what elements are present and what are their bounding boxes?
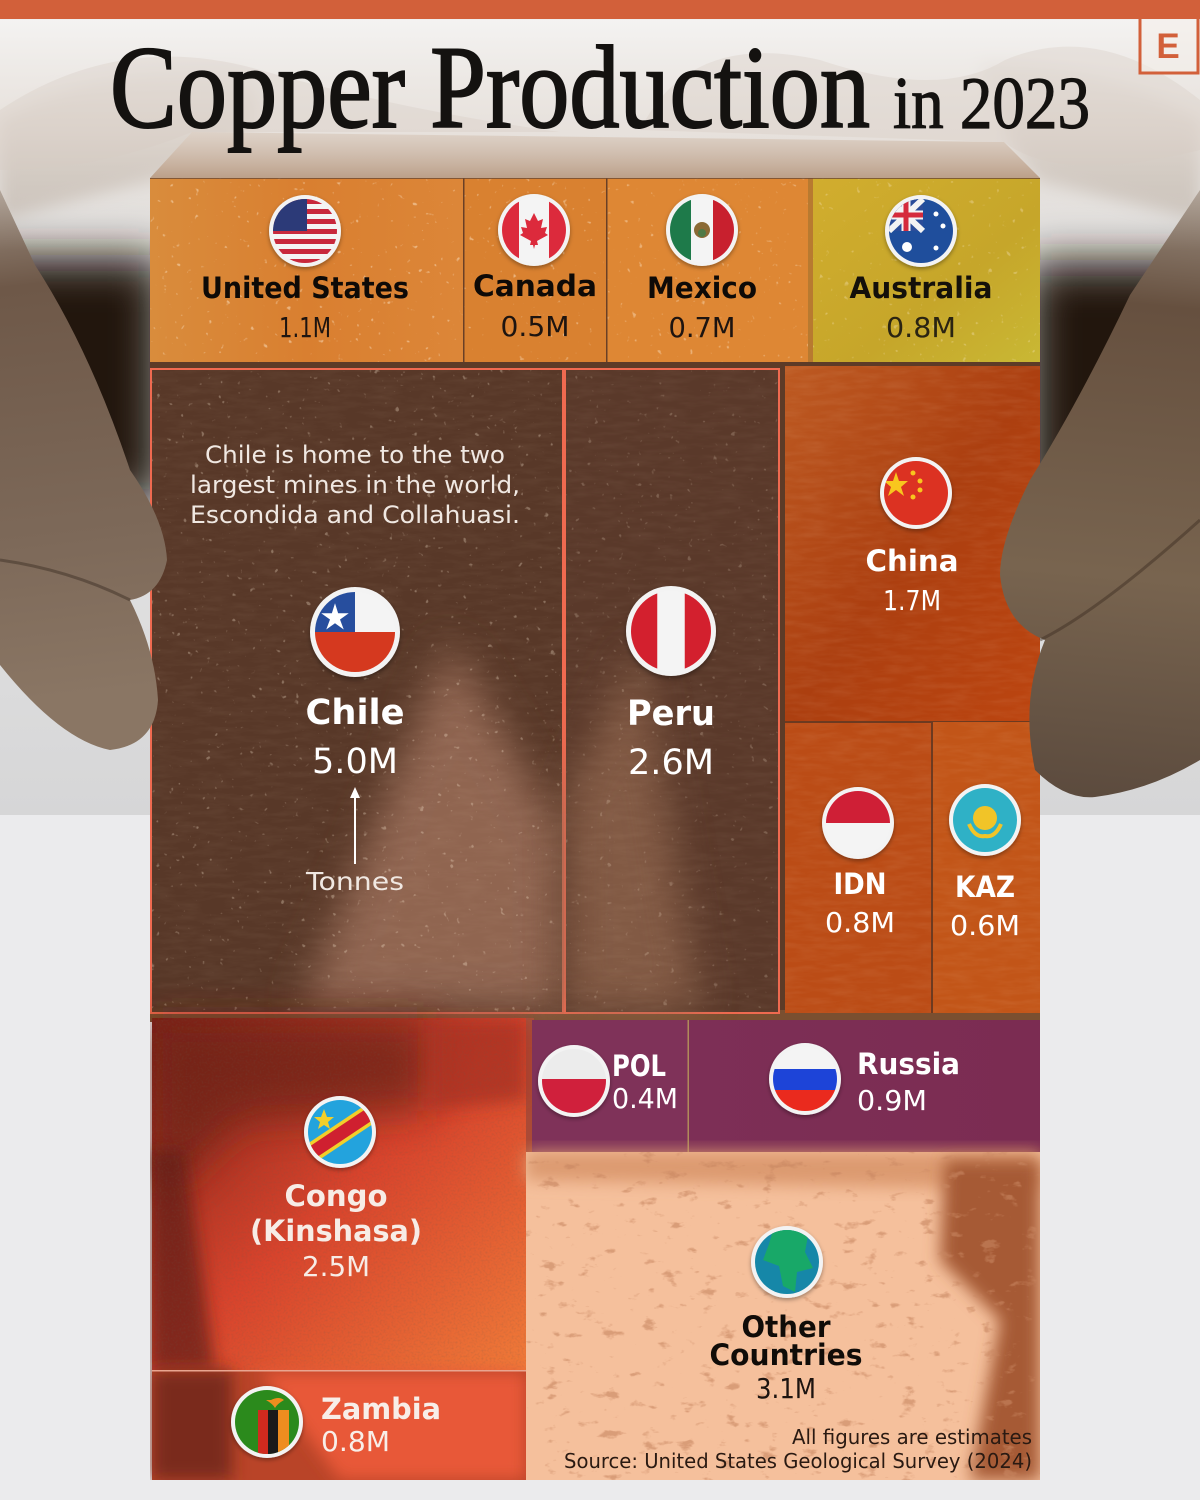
value: 0.8M: 0.8M — [825, 906, 895, 939]
label: Congo (Kinshasa): Congo — [284, 1179, 388, 1213]
value: 0.8M: 0.8M — [321, 1425, 390, 1458]
panel: Canada — [463, 178, 606, 362]
title: Copper Production — [110, 22, 870, 153]
logo — [1140, 19, 1198, 73]
panel: Zambia — [152, 1370, 526, 1480]
icon: Kazakhstan flag — [949, 784, 1021, 856]
text: Chile note: Chile is home to the two — [205, 441, 505, 469]
label: POL: POL — [612, 1049, 666, 1083]
background: pale top gloves fade — [0, 20, 1200, 250]
glove: right hand — [1000, 190, 1200, 797]
panel: Poland — [532, 1020, 689, 1152]
label: Chile: Chile — [306, 693, 404, 733]
value: 1.1M: 1.1M — [279, 311, 331, 344]
value: 5.0M: 5.0M — [312, 742, 398, 782]
icon: globe — [751, 1226, 823, 1298]
panel: Other Countries — [526, 1152, 1040, 1480]
icon: Peru flag — [626, 586, 716, 676]
panel: Kazakhstan — [931, 722, 1040, 1013]
panel: Australia — [813, 178, 1040, 362]
label: IDN: IDN — [834, 867, 886, 901]
treemap panels — [150, 176, 1040, 1480]
label: Tonnes: Tonnes — [305, 867, 404, 896]
text: Chile note: Escondida and Collahuasi. — [190, 501, 520, 529]
label: Other Countries: Other — [742, 1310, 831, 1344]
panel: Indonesia — [785, 721, 1040, 1013]
logo: E — [1156, 27, 1180, 66]
value: 0.6M: 0.6M — [950, 909, 1020, 942]
label: United States: United States — [201, 271, 409, 305]
value: 2.6M: 2.6M — [628, 743, 714, 783]
label: Zambia: Zambia — [321, 1392, 441, 1426]
label: Other Countries: Countries — [710, 1338, 862, 1372]
panel: Chile — [151, 369, 563, 1013]
value: 0.4M: 0.4M — [612, 1082, 678, 1115]
icon: Congo flag — [304, 1096, 376, 1168]
label: Australia: Australia — [850, 271, 992, 305]
label: Mexico: Mexico — [647, 271, 757, 305]
panel: Peru — [565, 369, 779, 1013]
label: Russia: Russia — [857, 1047, 960, 1081]
text: Chile note: largest mines in the world, — [190, 471, 520, 499]
value: 0.7M: 0.7M — [668, 311, 736, 344]
label: Peru: Peru — [627, 694, 715, 734]
panel: China — [785, 366, 1040, 722]
icon: Chile flag — [310, 587, 400, 677]
panel: United States — [150, 178, 463, 362]
label: Canada: Canada — [473, 269, 597, 303]
icon: Indonesia flag — [822, 787, 894, 859]
label: Congo (Kinshasa): (Kinshasa) — [250, 1214, 422, 1248]
value: 0.8M: 0.8M — [886, 311, 956, 344]
icon: Zambia flag — [231, 1386, 303, 1458]
icon: Mexico flag — [666, 194, 738, 266]
panel: Congo (Kinshasa) — [150, 1018, 526, 1370]
text: source note: All figures are estimates — [792, 1425, 1032, 1449]
value: 0.5M: 0.5M — [500, 310, 570, 343]
header bar — [0, 0, 1200, 19]
label: China: China — [866, 544, 958, 578]
icon: Canada flag — [498, 194, 570, 266]
value: 1.7M: 1.7M — [883, 584, 941, 617]
value: 2.5M: 2.5M — [302, 1250, 370, 1283]
panel: Mexico — [606, 178, 808, 362]
value: 3.1M: 3.1M — [756, 1372, 816, 1405]
panel: Russia — [689, 1020, 1040, 1152]
icon: US flag — [269, 195, 341, 267]
icon: Australia flag — [885, 195, 957, 267]
icon: China flag — [880, 457, 952, 529]
value: 0.9M: 0.9M — [857, 1084, 927, 1117]
label: KAZ: KAZ — [955, 870, 1015, 904]
icon: Poland flag — [538, 1045, 610, 1117]
glove: left hand — [0, 190, 167, 750]
title: in 2023 — [893, 63, 1090, 145]
arrow: to value — [350, 787, 360, 864]
icon: Russia flag — [769, 1043, 841, 1115]
text: source note: Source: United States Geological Survey (2024) — [564, 1449, 1032, 1473]
copper block top face — [150, 132, 1040, 178]
